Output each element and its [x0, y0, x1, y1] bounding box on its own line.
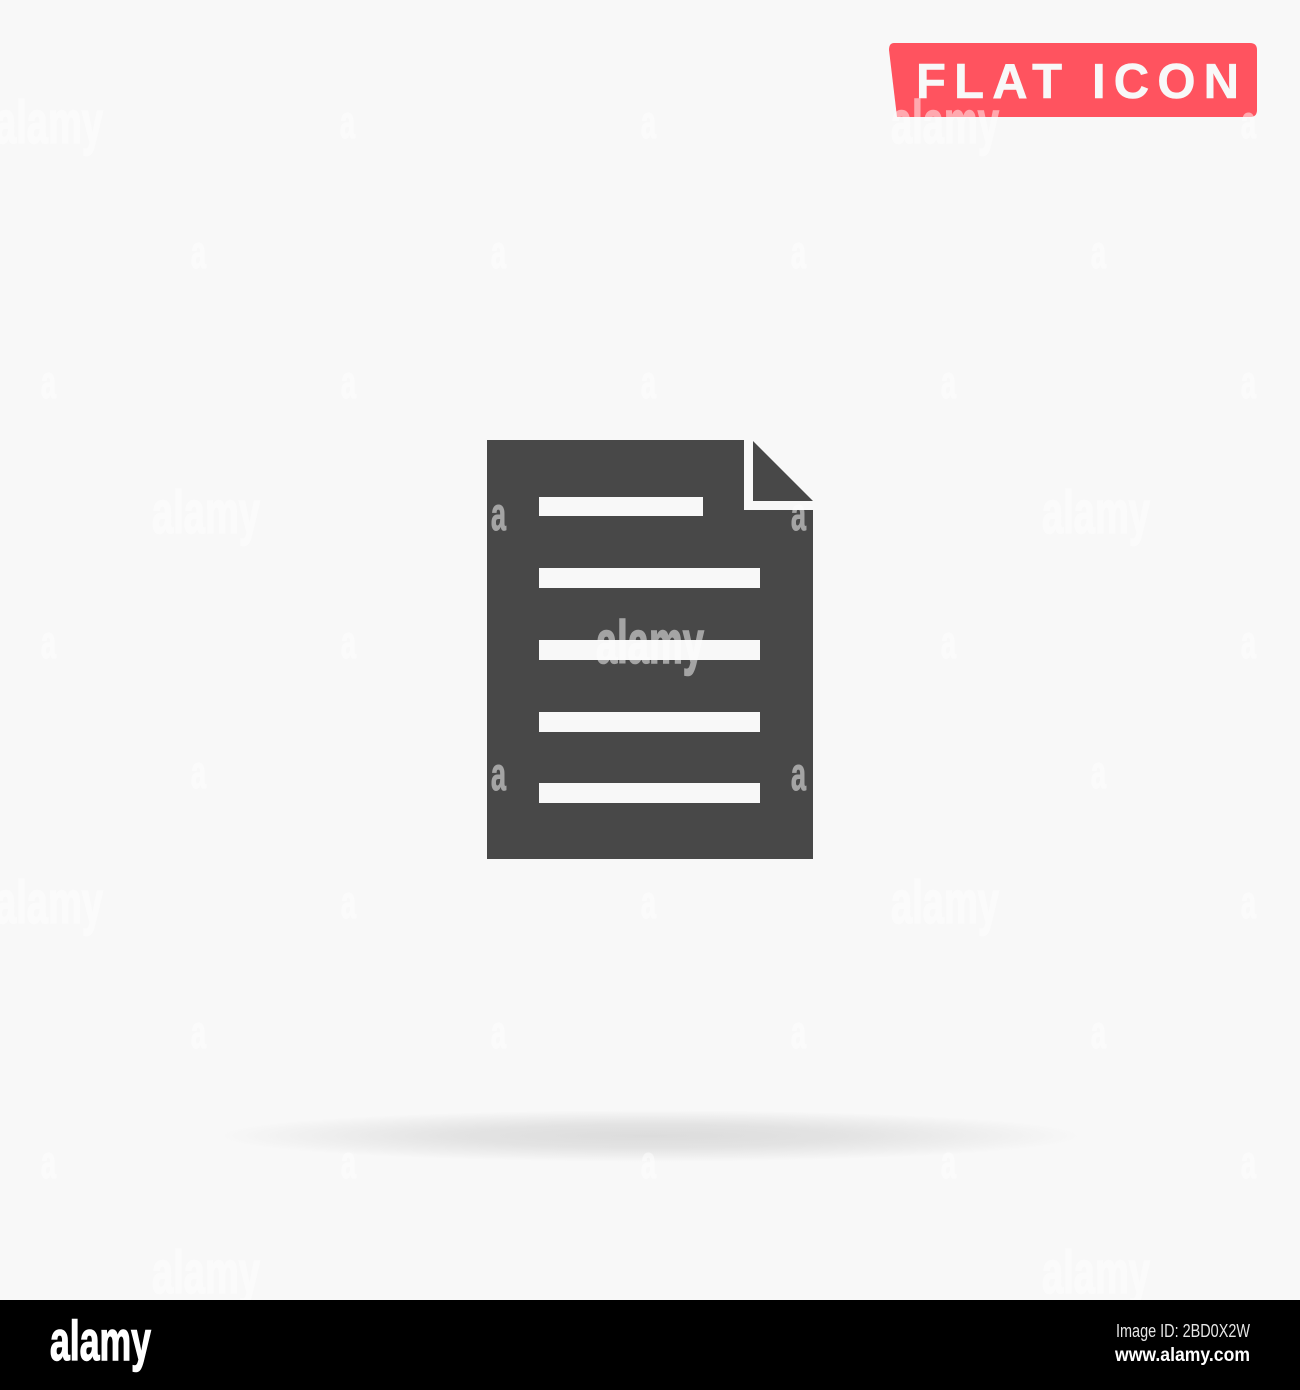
- watermark: small a marks: a: [491, 748, 506, 800]
- watermark: alamy repeated: alamy: [891, 869, 999, 936]
- watermark: small a marks: a: [941, 356, 956, 408]
- watermark: small a marks: a: [340, 96, 355, 148]
- watermark: small a marks: a: [641, 1136, 656, 1188]
- watermark: alamy repeated: alamy: [1042, 479, 1150, 546]
- watermark: alamy repeated: [0, 89, 1150, 1306]
- badge label: FLAT ICON: [916, 55, 1239, 109]
- watermark: alamy repeated: alamy: [152, 479, 260, 546]
- watermark: small a marks: a: [791, 226, 806, 278]
- watermark: alamy repeated: alamy: [1042, 1239, 1150, 1306]
- image id: Image ID: 2BD0X2W: [1116, 1321, 1250, 1341]
- page body: [487, 440, 813, 859]
- watermark: small a marks: a: [341, 616, 356, 668]
- watermark: alamy repeated: alamy: [0, 869, 103, 936]
- watermark: alamy repeated: alamy: [596, 609, 704, 676]
- watermark: small a marks: a: [1091, 746, 1106, 798]
- watermark: small a marks: a: [941, 1136, 956, 1188]
- watermark: small a marks: a: [1241, 1136, 1256, 1188]
- ground shadow: [218, 1110, 1082, 1162]
- watermark: small a marks: [41, 96, 1256, 1188]
- footer bar: [0, 1300, 1300, 1390]
- watermark: small a marks: a: [191, 226, 206, 278]
- watermark: small a marks: a: [341, 1136, 356, 1188]
- watermark: small a marks: a: [641, 96, 656, 148]
- watermark: small a marks: a: [341, 356, 356, 408]
- watermark: small a marks: a: [641, 356, 656, 408]
- watermark: alamy repeated: alamy: [0, 89, 103, 156]
- watermark: small a marks: a: [341, 876, 356, 928]
- watermark: alamy repeated: alamy: [891, 89, 999, 156]
- watermark: small a marks: a: [1241, 356, 1256, 408]
- watermark: small a marks: a: [1091, 226, 1106, 278]
- icon: document: [487, 440, 813, 859]
- watermark: small a marks: a: [641, 876, 656, 928]
- footer logo: alamy: [50, 1309, 151, 1372]
- watermark: small a marks: a: [1241, 96, 1256, 148]
- watermark: alamy repeated: alamy: [152, 1239, 260, 1306]
- watermark: small a marks: a: [191, 1006, 206, 1058]
- watermark: small a marks: a: [1241, 616, 1256, 668]
- watermark: small a marks: a: [41, 1136, 56, 1188]
- watermark: small a marks: a: [491, 488, 506, 540]
- watermark: small a marks: a: [1091, 1006, 1106, 1058]
- watermark: small a marks: a: [41, 616, 56, 668]
- watermark: small a marks: a: [791, 748, 806, 800]
- watermark: small a marks: a: [791, 488, 806, 540]
- watermark: small a marks: a: [491, 1006, 506, 1058]
- watermark: small a marks: a: [1241, 876, 1256, 928]
- watermark: small a marks: a: [791, 1006, 806, 1058]
- watermark: small a marks: a: [41, 356, 56, 408]
- watermark: small a marks: a: [941, 616, 956, 668]
- watermark: small a marks: a: [191, 746, 206, 798]
- watermark: small a marks: a: [491, 226, 506, 278]
- text lines: [539, 497, 760, 803]
- folded corner: [753, 441, 813, 501]
- flat icon badge: [889, 43, 1257, 117]
- website: www.alamy.com: [1114, 1345, 1250, 1366]
